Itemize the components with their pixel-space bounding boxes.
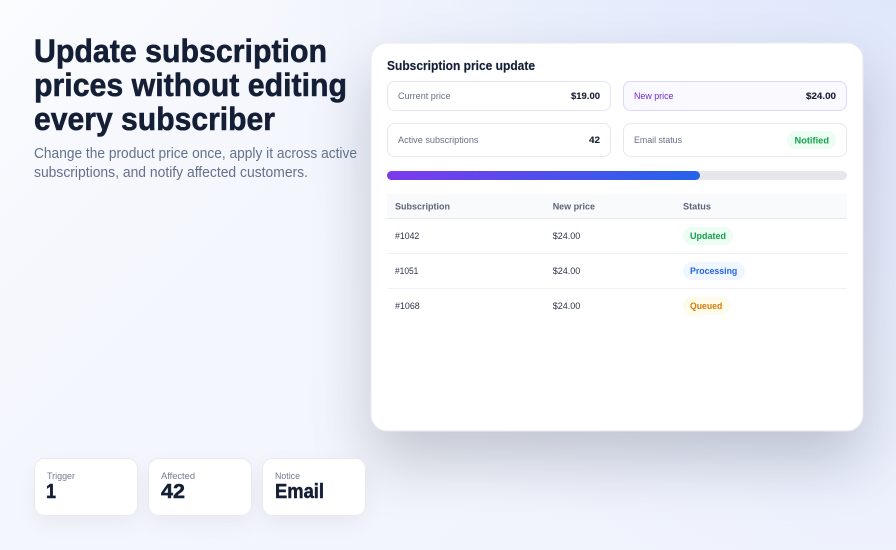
progress bar (387, 171, 847, 180)
badge: notified (787, 131, 836, 149)
stat card: affected: Affected (161, 471, 195, 481)
title: Update subscription (34, 33, 327, 69)
stat card: trigger: 1 (46, 480, 56, 503)
stat card: affected (148, 458, 252, 516)
field: active subscriptions: Active subscriptions (398, 135, 479, 145)
row 1051: $24.00 (553, 265, 580, 276)
badge: notified: Notified (794, 134, 829, 145)
table (387, 194, 847, 315)
field: email status (624, 124, 846, 156)
title (34, 33, 347, 137)
row 1042 (387, 227, 847, 254)
stat card: notice (262, 458, 366, 516)
field: current price (388, 82, 610, 110)
subtitle: Change the product price once, apply it across active (34, 146, 357, 162)
stat card: notice: Email (275, 480, 324, 503)
table header: Subscription (395, 201, 450, 211)
field: active subscriptions (388, 124, 610, 156)
title: every subscriber (34, 101, 275, 137)
field: active subscriptions: 42 (589, 134, 600, 145)
stat card: trigger (34, 458, 138, 516)
row 1068: Queued (690, 300, 723, 311)
row 1042: Updated (690, 230, 726, 241)
row 1068 (395, 297, 730, 315)
stat card: trigger: Trigger (47, 471, 75, 481)
row 1042: #1042 (395, 230, 419, 241)
row 1051: Processing (690, 265, 738, 276)
field: current price: $19.00 (571, 90, 600, 101)
field: email status: Email status (634, 135, 682, 145)
field: new price: $24.00 (806, 90, 836, 101)
stat card: notice: Notice (275, 471, 300, 481)
subtitle: subscriptions, and notify affected customers. (34, 165, 308, 181)
row 1051 (387, 262, 847, 289)
field: new price (624, 82, 846, 110)
subtitle (34, 146, 357, 181)
field: new price: New price (634, 91, 674, 101)
panel: subscription price update (371, 43, 863, 431)
row 1068: #1068 (395, 300, 420, 311)
table header: New price (553, 201, 595, 211)
stat card: affected: 42 (161, 480, 185, 503)
table header: Status (683, 201, 711, 211)
title: prices without editing (34, 67, 347, 103)
field: current price: Current price (398, 91, 450, 101)
row 1068: $24.00 (553, 300, 580, 311)
panel heading: Subscription price update (387, 58, 535, 73)
row 1042: $24.00 (553, 230, 580, 241)
table header (387, 194, 847, 219)
row 1051: #1051 (395, 265, 418, 276)
